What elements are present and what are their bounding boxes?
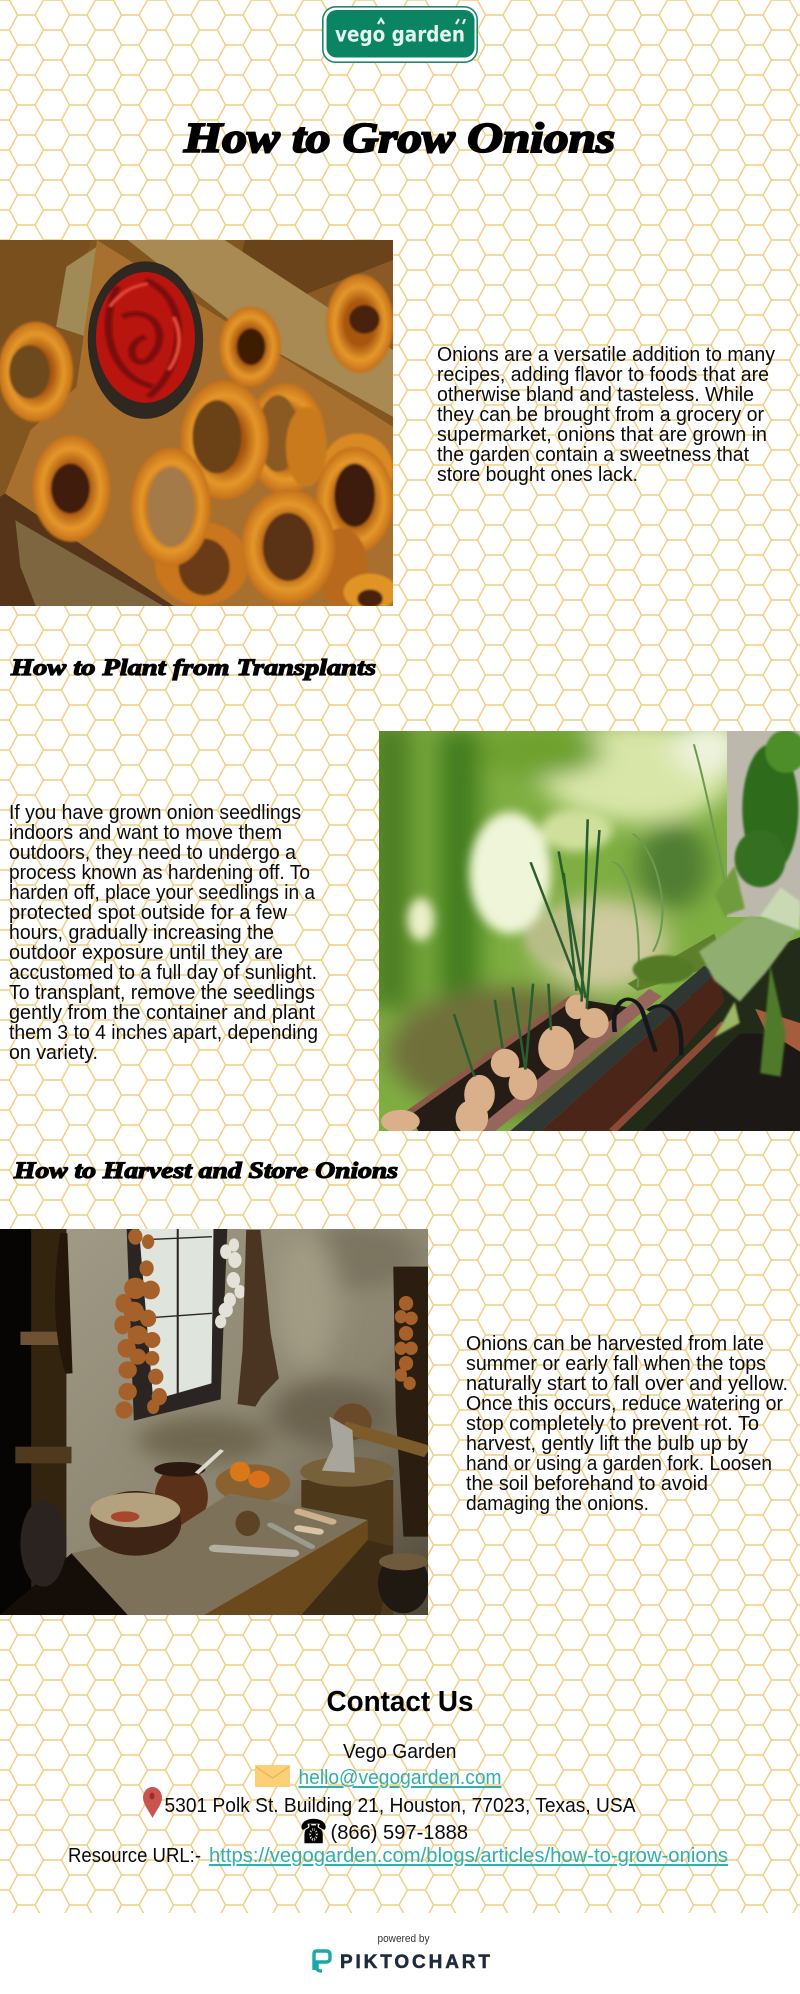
basket with small pumpkins (216, 1462, 290, 1502)
icon: telephone: ☎ (300, 1812, 327, 1851)
address: 5301 Polk St. Building 21, Houston, 77023, Texas, USA (164, 1794, 636, 1817)
transplant text: process known as hardening off. To (9, 861, 310, 884)
intro text: otherwise bland and tasteless. While (437, 383, 754, 406)
drip hose (614, 999, 681, 1055)
transplant text: If you have grown onion seedlings (9, 801, 301, 824)
icon: Piktochart mark (314, 1951, 330, 1971)
hanging animal pelt (237, 1230, 279, 1407)
harvest text: harvest, gently lift the bulb up by (466, 1432, 749, 1455)
logo: Vego Garden: vego garden (335, 22, 465, 46)
email link: hello@vegogarden.com (298, 1766, 502, 1789)
transplant text: outdoors, they need to undergo a (9, 841, 297, 864)
harvest text (466, 1332, 788, 1515)
contact heading: Contact Us (326, 1686, 474, 1718)
transplant text (9, 801, 318, 1064)
intro text: recipes, adding flavor to foods that are (437, 363, 769, 386)
footer: powered by Piktochart: PIKTOCHART (340, 1952, 490, 1973)
resource label: Resource URL:- (68, 1844, 201, 1867)
transplant text: them 3 to 4 inches apart, depending (9, 1021, 318, 1044)
footer: powered by Piktochart (0, 1913, 800, 1994)
intro text (437, 343, 776, 486)
transplant text: outdoor exposure until they are (9, 941, 283, 964)
bowl (89, 1491, 181, 1556)
harvest text: Onions can be harvested from late (466, 1332, 764, 1355)
garlic braid (215, 1238, 246, 1328)
photo: onion rings with ketchup (0, 240, 393, 606)
intro text: supermarket, onions that are grown in (437, 423, 767, 446)
footer: powered by Piktochart: powered by (378, 1933, 430, 1945)
planter boxes and soil (408, 934, 800, 1131)
intro text: store bought ones lack. (437, 463, 638, 486)
icon: map pin (143, 1787, 162, 1818)
icon: envelope (255, 1765, 290, 1787)
photo: rustic cellar with hanging onions (0, 1229, 428, 1615)
contact section (68, 1686, 728, 1867)
transplant text: indoors and want to move them (9, 821, 282, 844)
company name: Vego Garden (343, 1740, 456, 1763)
phone number: (866) 597-1888 (330, 1821, 468, 1844)
harvest text: the soil beforehand to avoid (466, 1472, 708, 1495)
heading: How to Harvest and Store Onions: How to Harvest and Store Onions (13, 1158, 398, 1183)
onion rings (0, 274, 397, 610)
heading: How to Plant from Transplants: How to Plant from Transplants (10, 655, 376, 680)
transplant text: To transplant, remove the seedlings (9, 981, 315, 1004)
transplant text: gently from the container and plant (9, 1001, 315, 1024)
resource link: https://vegogarden.com/blogs/articles/how-to-grow-onions (209, 1844, 728, 1867)
transplant text: protected spot outside for a few (9, 901, 287, 924)
onion shoots (454, 744, 724, 1077)
harvest text: hand or using a garden fork. Loosen (466, 1452, 772, 1475)
intro text: Onions are a versatile addition to many (437, 343, 776, 366)
harvest text: naturally start to fall over and yellow. (466, 1372, 788, 1395)
herb leaves (633, 730, 800, 1077)
transplant text: harden off, place your seedlings in a (9, 881, 316, 904)
transplant text: accustomed to a full day of sunlight. (9, 961, 317, 984)
intro text: they can be brought from a grocery or (437, 403, 764, 426)
tools on the table (215, 1511, 332, 1553)
transplant text: hours, gradually increasing the (9, 921, 274, 944)
photo: onions in a planter (379, 731, 800, 1131)
harvest text: summer or early fall when the tops (466, 1352, 766, 1375)
work table (0, 1493, 393, 1615)
harvest text: Once this occurs, reduce watering or (466, 1392, 783, 1415)
title: How to Grow Onions (183, 116, 615, 162)
pot and spoon (154, 1450, 222, 1527)
bucket and jug (20, 1500, 429, 1613)
harvest text: stop completely to prevent rot. To (466, 1412, 759, 1435)
onion bulbs (381, 995, 609, 1136)
hanging onions (114, 1229, 418, 1419)
ketchup bowl (88, 261, 203, 419)
harvest text: damaging the onions. (466, 1492, 649, 1515)
transplant text: on variety. (9, 1041, 98, 1064)
window (127, 1229, 227, 1421)
intro text: the garden contain a sweetness that (437, 443, 749, 466)
axe in stump (300, 1403, 428, 1615)
logo: Vego Garden (323, 7, 477, 62)
